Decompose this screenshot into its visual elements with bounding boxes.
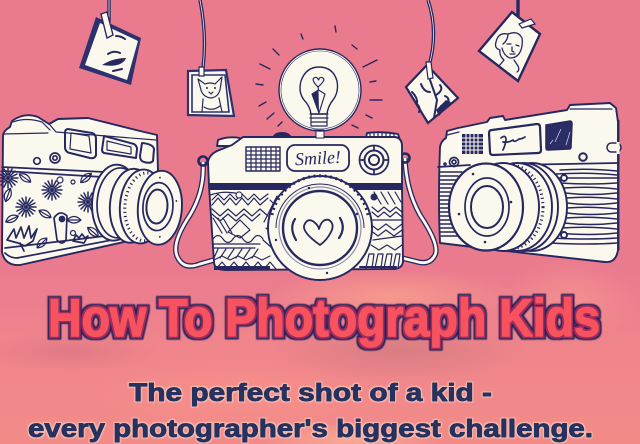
strap xyxy=(176,154,436,266)
lens xyxy=(89,163,185,246)
smile label: Smile! xyxy=(294,147,341,169)
camera: left with floral pattern xyxy=(0,115,185,265)
body xyxy=(208,137,403,270)
hanging photo: face xyxy=(79,0,141,85)
viewfinder grid xyxy=(246,147,280,171)
subtitle: every photographer's biggest challenge. xyxy=(28,415,593,443)
dark window xyxy=(546,121,572,150)
floral pattern xyxy=(0,168,101,251)
signature xyxy=(501,136,525,150)
hanging photo: tree xyxy=(406,0,458,123)
lens xyxy=(449,163,567,251)
viewfinder window xyxy=(489,124,541,155)
pattern xyxy=(210,192,402,269)
hanging photo: girl xyxy=(479,0,540,81)
smile label xyxy=(287,145,349,171)
subtitle: The perfect shot of a kid - xyxy=(129,379,492,407)
camera: center with patterned body xyxy=(176,132,436,280)
camera: right with striped body xyxy=(438,103,621,262)
hanging photo: dog xyxy=(188,0,234,116)
dial rings xyxy=(360,146,388,174)
grid xyxy=(462,134,483,154)
subtitle xyxy=(28,379,593,443)
light bulb flash xyxy=(256,26,382,138)
light rays xyxy=(256,26,382,128)
main lens xyxy=(268,176,372,280)
top dials xyxy=(217,137,243,146)
